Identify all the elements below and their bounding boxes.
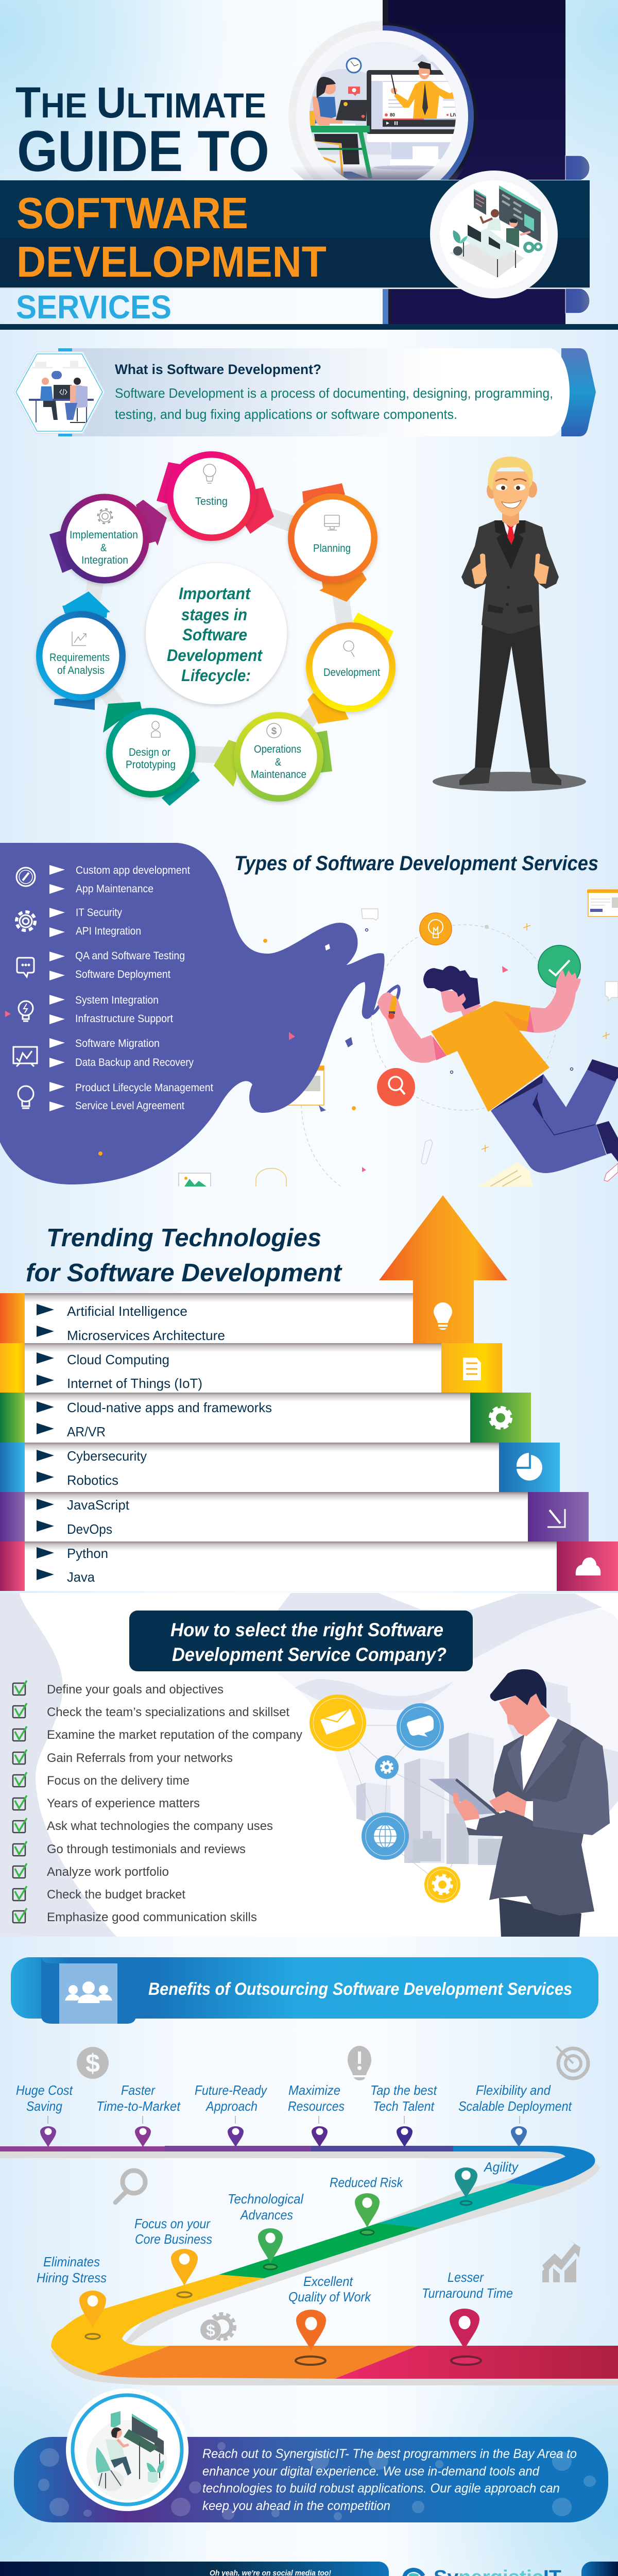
icon: dollar gear: $: [206, 2321, 215, 2340]
icon: chat: [17, 958, 34, 977]
stage: testing: Testing: [195, 496, 228, 507]
service list: Data Backup and Recovery: [75, 1057, 194, 1069]
service list: IT Security: [76, 907, 122, 919]
stage: design or prototyping: Design or: [129, 747, 170, 758]
panel: what is software development: [14, 348, 596, 436]
checklist: [47, 1683, 302, 1924]
illustration: businessman with tablet: [428, 1669, 610, 1937]
service list: System Integration: [75, 994, 159, 1006]
panel text: [115, 385, 553, 422]
hands: [453, 1792, 479, 1821]
centre circle: important stages: [146, 563, 287, 704]
road segments: [0, 2146, 165, 2151]
icon: chat badge: [397, 1703, 444, 1751]
benefit labels: Technological: [228, 2191, 304, 2207]
checklist: Check the team’s specializations and skillset: [47, 1705, 289, 1719]
face: [499, 1693, 550, 1736]
top and bottom tabs: [58, 348, 72, 436]
paint blob: [0, 843, 385, 1184]
stage: operations and maintenance: [234, 712, 323, 802]
panel: benefits of outsourcing: [0, 1957, 618, 2385]
checkboxes: [13, 1681, 27, 1923]
service list: Service Level Agreement: [75, 1100, 184, 1112]
benefit labels: Focus on your: [134, 2216, 211, 2231]
panel text: testing, and bug fixing applications or software components.: [115, 406, 457, 422]
pencil: [389, 996, 397, 1012]
stage: operations and maintenance: &: [275, 756, 281, 768]
benefit labels: Eliminates: [43, 2254, 100, 2269]
benefit labels: Tap the best: [370, 2082, 438, 2098]
panel heading: What is Software Development?: [115, 362, 321, 377]
icon: target: [556, 2046, 588, 2078]
shirt: [521, 1716, 558, 1790]
jacket: [467, 1719, 610, 1916]
panel arrow tip: [561, 348, 596, 436]
small circle illustration: developers at desk: [430, 171, 558, 298]
benefit labels: Approach: [205, 2098, 258, 2114]
panel: types of software development services: [0, 843, 618, 1194]
big arrow: [379, 1195, 507, 1343]
technology list: Cloud-native apps and frameworks: [67, 1400, 272, 1415]
stage: implementation and integration: [60, 494, 149, 583]
centre circle: important stages: Development: [167, 646, 263, 665]
jacket sleeve: [531, 1736, 610, 1835]
neck and face: [440, 990, 482, 1017]
navy back panel bottom: [383, 289, 590, 324]
shoes: [459, 768, 491, 785]
icon: pie chart: [517, 1453, 542, 1481]
icon: gear: [490, 1408, 511, 1428]
icon: people: [65, 1981, 112, 2003]
stage: design or prototyping: Prototyping: [126, 759, 176, 771]
service list: Software Deployment: [75, 969, 170, 980]
illustration circle: [66, 2388, 188, 2511]
stage: implementation and integration: Integration: [81, 554, 128, 566]
stage: requirements of analysis: of Analysis: [57, 665, 105, 676]
service list: QA and Software Testing: [75, 950, 185, 962]
technology list: Cloud Computing: [67, 1352, 169, 1367]
CTA text: Reach out to SynergisticIT- The best programmers in the Bay Area to: [202, 2447, 577, 2461]
checklist: Years of experience matters: [47, 1797, 200, 1810]
CTA text: technologies to build robust applications. Our agile approach can: [202, 2481, 560, 2496]
grey icons: [77, 2046, 588, 2341]
service list: Product Lifecycle Management: [75, 1082, 213, 1094]
tablet: [428, 1778, 499, 1815]
background cards: [179, 890, 618, 1194]
service list: Software Migration: [75, 1038, 160, 1049]
right tab top: [565, 156, 590, 180]
benefit labels: Quality of Work: [288, 2289, 372, 2304]
checklist: Examine the market reputation of the company: [47, 1728, 302, 1742]
heading: for Software Development: [26, 1259, 342, 1287]
icon: magnifier: [115, 2171, 145, 2202]
road shadow diagonal: [124, 2159, 600, 2343]
centre circle: important stages: Important: [179, 584, 251, 603]
benefit labels: Resources: [288, 2098, 345, 2114]
heading: [26, 1224, 342, 1287]
checklist: Focus on the delivery time: [47, 1774, 190, 1788]
title line: Development: DEVELOPMENT: [16, 238, 327, 286]
panel: how to select the right company: [0, 1593, 618, 1937]
icon: magnifier: [344, 641, 354, 657]
benefit labels: [16, 2082, 573, 2304]
hero circle outer rim: [288, 21, 383, 180]
checklist: Check the budget bracket: [47, 1888, 185, 1902]
pins upper row: [40, 2126, 527, 2147]
benefit labels: Core Business: [135, 2231, 212, 2247]
arrows around cycle: [49, 462, 393, 806]
icon: globe badge: [362, 1812, 409, 1860]
road shadow bottom: [50, 2349, 618, 2385]
centre circle: important stages: Lifecycle:: [181, 666, 251, 685]
panel body: [58, 348, 570, 436]
benefit labels: Hiring Stress: [37, 2270, 107, 2285]
stage: operations and maintenance: Maintenance: [251, 769, 306, 781]
technology list: Internet of Things (IoT): [67, 1376, 202, 1391]
live counter: 80: [390, 112, 395, 117]
arm left: [377, 992, 447, 1063]
benefit labels: Lesser: [448, 2269, 484, 2285]
head: [487, 482, 497, 499]
benefit labels: Time-to-Market: [96, 2098, 181, 2114]
CTA text: enhance your digital experience. We use in-demand tools and: [202, 2464, 540, 2479]
icon: dollar: [267, 723, 281, 738]
stage: implementation and integration: Implementation: [70, 529, 138, 541]
bubbles: [38, 2442, 596, 2520]
icon: idea alert bulb: [348, 2046, 371, 2080]
vest: [494, 520, 525, 569]
service list: Infrastructure Support: [75, 1013, 173, 1025]
checklist: Define your goals and objectives: [47, 1683, 224, 1697]
pins lower road: [79, 2167, 481, 2365]
centre circle: important stages: stages in: [181, 605, 247, 624]
CTA text: [202, 2447, 577, 2513]
hair: [423, 966, 480, 1009]
icon: dollar gear: [200, 2314, 235, 2341]
benefit labels: Faster: [121, 2082, 156, 2098]
icon: bulb: [203, 464, 216, 483]
icon: compass: [16, 868, 35, 886]
service list: App Maintenance: [76, 883, 153, 895]
heading banner: Benefits of Outsourcing Software Development Services: [148, 1979, 572, 1999]
benefit labels: Agility: [483, 2159, 519, 2175]
dashed orbit: [301, 925, 557, 1187]
panel: call to action: [14, 2388, 608, 2522]
icon: presentation chart: [13, 1047, 37, 1066]
icon: bulb: [434, 1302, 452, 1330]
road shadow top: [0, 2151, 569, 2159]
roadmap road: [0, 2146, 618, 2385]
shirt and tie: [503, 520, 518, 545]
hero blue ring: [383, 24, 477, 180]
icon: power bulb: [19, 1001, 33, 1021]
icon: chart: [72, 632, 86, 646]
title line: Services: SERVICES: [16, 289, 171, 326]
trousers: [475, 623, 550, 769]
jacket: [461, 520, 559, 634]
checklist: Analyze work portfolio: [47, 1865, 169, 1879]
step rows: [0, 1293, 618, 1591]
checklist: Emphasize good communication skills: [47, 1910, 257, 1924]
stage: implementation and integration: &: [100, 542, 107, 554]
arm right: [527, 970, 581, 1033]
icon: gear: [98, 509, 112, 523]
heading: Trending Technologies: [46, 1224, 321, 1252]
benefit labels: Scalable Deployment: [458, 2098, 573, 2114]
technology list: JavaScript: [67, 1497, 130, 1513]
footer bar left: [0, 2562, 389, 2576]
benefit labels: Reduced Risk: [330, 2175, 404, 2190]
footer bar right: [581, 2562, 618, 2576]
icon: gear badge yellow: [424, 1867, 460, 1903]
icon: cloud: [576, 1557, 600, 1575]
benefit labels: Tech Talent: [373, 2098, 435, 2114]
stage: operations and maintenance: Operations: [254, 743, 301, 755]
technology list: Cybersecurity: [67, 1448, 147, 1464]
icon: dollar: $: [271, 726, 277, 737]
icon: person: [151, 721, 160, 737]
icon: growth chart: [542, 2241, 580, 2282]
checklist: Ask what technologies the company uses: [47, 1819, 273, 1833]
heading banner: [11, 1957, 598, 2024]
benefit labels: Saving: [26, 2098, 62, 2114]
illustration: businessman thumbs up: [433, 456, 586, 791]
title line: The Ultimate: THE ULTIMATE: [15, 78, 266, 127]
cycle connector ring: [81, 496, 351, 757]
technology list: [67, 1303, 272, 1585]
benefit labels: Huge Cost: [16, 2082, 74, 2098]
hero header: [0, 0, 618, 330]
CTA text: keep you ahead in the competition: [202, 2499, 390, 2513]
road tick lines: [48, 2116, 520, 2124]
navy back panel top: [383, 0, 565, 180]
trousers: [491, 1070, 616, 1173]
stage: testing: [167, 451, 256, 541]
step icons: [434, 1302, 600, 1575]
hero illustration: online presenter: LIVE: [450, 112, 460, 117]
stage: development: [306, 622, 396, 712]
heading box: [129, 1611, 473, 1671]
hero bottom fade: [332, 167, 434, 180]
icon: orange bulb badge: [419, 912, 452, 945]
title line: Guide to: GUIDE TO: [17, 119, 269, 183]
list arrows: [37, 1304, 54, 1580]
main band: [0, 180, 590, 289]
stage: requirements of analysis: [36, 611, 126, 701]
technology list: AR/VR: [67, 1424, 106, 1439]
technology list: Artificial Intelligence: [67, 1303, 187, 1319]
technology list: Robotics: [67, 1472, 118, 1488]
centre circle: important stages: Software: [182, 625, 247, 644]
chart: trending technologies staircase: [0, 1195, 618, 1591]
service list: Custom app development: [76, 865, 190, 876]
service list: API Integration: [76, 925, 141, 937]
chart: software development lifecycle: [36, 451, 396, 806]
icon: monitor: [324, 515, 339, 530]
stage: requirements of analysis: Requirements: [49, 652, 110, 664]
icon: gear: [16, 912, 35, 930]
background shapes: [0, 1593, 618, 1937]
lapels: [507, 1719, 574, 1794]
stage: planning: Planning: [313, 543, 351, 554]
network lines: [338, 1723, 466, 1875]
pockets and buttons: [488, 604, 533, 614]
benefit labels: Flexibility and: [476, 2082, 551, 2098]
stage: design or prototyping: [106, 708, 196, 798]
title line: Software: SOFTWARE: [16, 189, 248, 238]
icon: gear badge small: [375, 1755, 399, 1779]
checklist: Go through testimonials and reviews: [47, 1842, 246, 1856]
illustration: flying developer: [377, 966, 618, 1173]
technology list: DevOps: [67, 1521, 112, 1537]
hexagon illustration: [14, 352, 105, 433]
hero illustration: online presenter: [307, 54, 460, 178]
stage: planning: [288, 494, 377, 583]
hero white circle: [296, 30, 468, 180]
icon: expand arrow: [547, 1509, 565, 1527]
hair: [490, 1669, 546, 1708]
benefit labels: Future-Ready: [195, 2082, 268, 2098]
benefit labels: Turnaround Time: [422, 2285, 513, 2301]
service icons: [13, 868, 37, 1108]
benefit labels: Maximize: [288, 2082, 340, 2098]
decorative confetti: [5, 923, 610, 1172]
section divider strip: [0, 324, 618, 330]
footer bar: [0, 2562, 618, 2576]
checklist: Gain Referrals from your networks: [47, 1751, 233, 1765]
trousers: [499, 1898, 581, 1937]
pill background: [14, 2437, 608, 2522]
icon: dollar coin: [77, 2047, 109, 2079]
benefit labels: Excellent: [303, 2274, 354, 2289]
heading box: Development Service Company?: [172, 1644, 447, 1665]
city skyline: [356, 1681, 571, 1865]
icon: mail badge: [310, 1694, 366, 1751]
icon: red search badge: [377, 1068, 415, 1106]
icon: dollar coin: $: [85, 2049, 100, 2078]
shirt: [431, 1001, 550, 1112]
service list: [49, 865, 213, 1112]
heading box: How to select the right Software: [170, 1619, 443, 1640]
panel text: Software Development is a process of documenting, designing, programming,: [115, 385, 553, 401]
icon: green check badge: [538, 945, 581, 988]
panel background: [0, 1593, 618, 1937]
benefit labels: Advances: [239, 2207, 293, 2223]
stage: development: Development: [323, 667, 380, 679]
icon: light bulb: [18, 1086, 33, 1108]
hands thumbs up: [472, 553, 487, 584]
hero fade outer: [288, 166, 466, 180]
technology list: Java: [67, 1569, 95, 1585]
technology list: Microservices Architecture: [67, 1328, 225, 1343]
icon: document: [463, 1358, 481, 1380]
technology list: Python: [67, 1546, 108, 1561]
